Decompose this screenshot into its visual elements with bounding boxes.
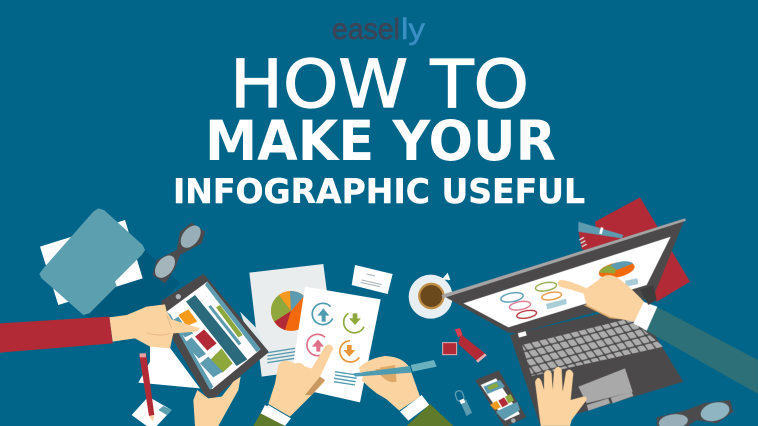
icon: down arrow orange [340, 341, 359, 362]
illustration [0, 197, 758, 426]
left desk items [0, 208, 280, 426]
phone [477, 372, 525, 426]
trackpad [578, 368, 633, 403]
icon: glasses bottom right [657, 399, 733, 426]
cuff edge [253, 408, 280, 426]
icon: up arrow pink [307, 334, 325, 356]
centre desk items [254, 265, 487, 426]
red marker [455, 328, 487, 363]
logo: easelly: ly [401, 13, 425, 46]
folder with papers [39, 208, 180, 343]
left pointing hand [254, 345, 333, 426]
right desk items [442, 197, 758, 426]
icon: sticky note [132, 397, 172, 426]
red notebook with pen [578, 197, 690, 302]
laptop lid [442, 218, 686, 333]
laptop base [510, 305, 683, 425]
white document with arrow icons [290, 287, 381, 402]
red arm with hand [0, 304, 200, 353]
icon: down arrow green [344, 313, 364, 333]
keyboard [522, 318, 663, 376]
business card [352, 265, 393, 294]
title: MAKE YOUR [205, 109, 556, 173]
icon: usb drive [454, 390, 472, 416]
tablet [160, 276, 267, 397]
title: HOW TO [230, 46, 529, 123]
title: INFOGRAPHIC USEFUL [173, 172, 585, 212]
screen: icons and pie chart [500, 259, 638, 320]
icon: glasses [151, 222, 205, 283]
red cube eraser [443, 343, 457, 355]
grey report with pie chart [249, 264, 337, 377]
hand on keyboard [535, 367, 587, 426]
sleeve and pointing hand on screen [557, 275, 758, 394]
logo: easelly: easel [332, 13, 400, 46]
right writing hand with pen [353, 356, 453, 426]
icon: up arrow teal [312, 303, 333, 325]
paper under tablet [138, 343, 200, 388]
icon: red pencil [139, 353, 154, 422]
hand holding tablet [193, 377, 241, 426]
coffee cup [409, 275, 453, 319]
title [173, 46, 585, 212]
